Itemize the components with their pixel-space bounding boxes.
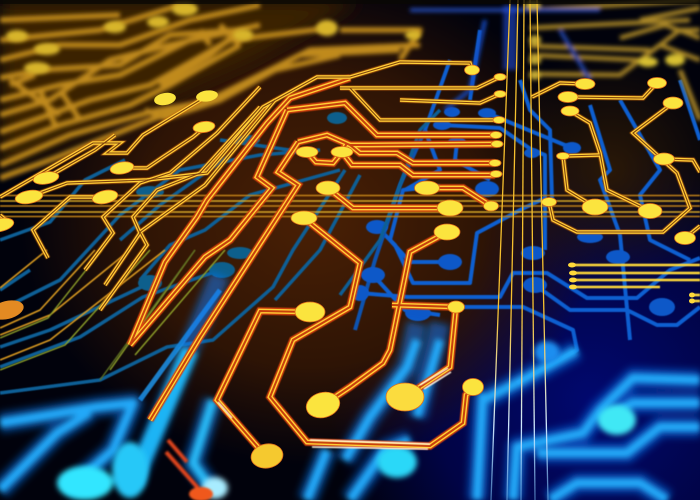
- blue mid-layer traces: [355, 30, 700, 383]
- orange pad lower left edge: [0, 297, 26, 323]
- blurred blue and gold traces top right: [410, 0, 700, 120]
- blurred glowing cyan traces at the bottom: [0, 275, 700, 500]
- small connector pads: [568, 262, 695, 304]
- blue pads: [351, 107, 675, 321]
- white hot highlights on lower traces: [218, 368, 451, 449]
- blurred top-left background glow: [0, 0, 360, 170]
- yellow paired traces: [130, 78, 497, 456]
- thinner trace halo: [0, 62, 700, 310]
- bright cyan blobs: [57, 341, 636, 500]
- horizontal gold bus lines: [0, 196, 700, 216]
- trace centre gap: [130, 78, 497, 456]
- blurred red pad and streaks: [166, 440, 213, 500]
- thinner yellow traces: [0, 62, 700, 310]
- parallel yellow connector bars: [572, 265, 700, 301]
- thinner trace centre gap: [0, 62, 700, 310]
- vertical converging gold lines: [491, 0, 548, 500]
- top dark edge: [0, 0, 700, 4]
- red-orange trace halo: [130, 78, 497, 456]
- blurred gold traces top left: [0, 5, 420, 178]
- teal traces and pads on the left: [0, 110, 440, 400]
- blurred gold pads top left: [6, 2, 421, 74]
- thin fading gold traces lower left: [0, 250, 225, 380]
